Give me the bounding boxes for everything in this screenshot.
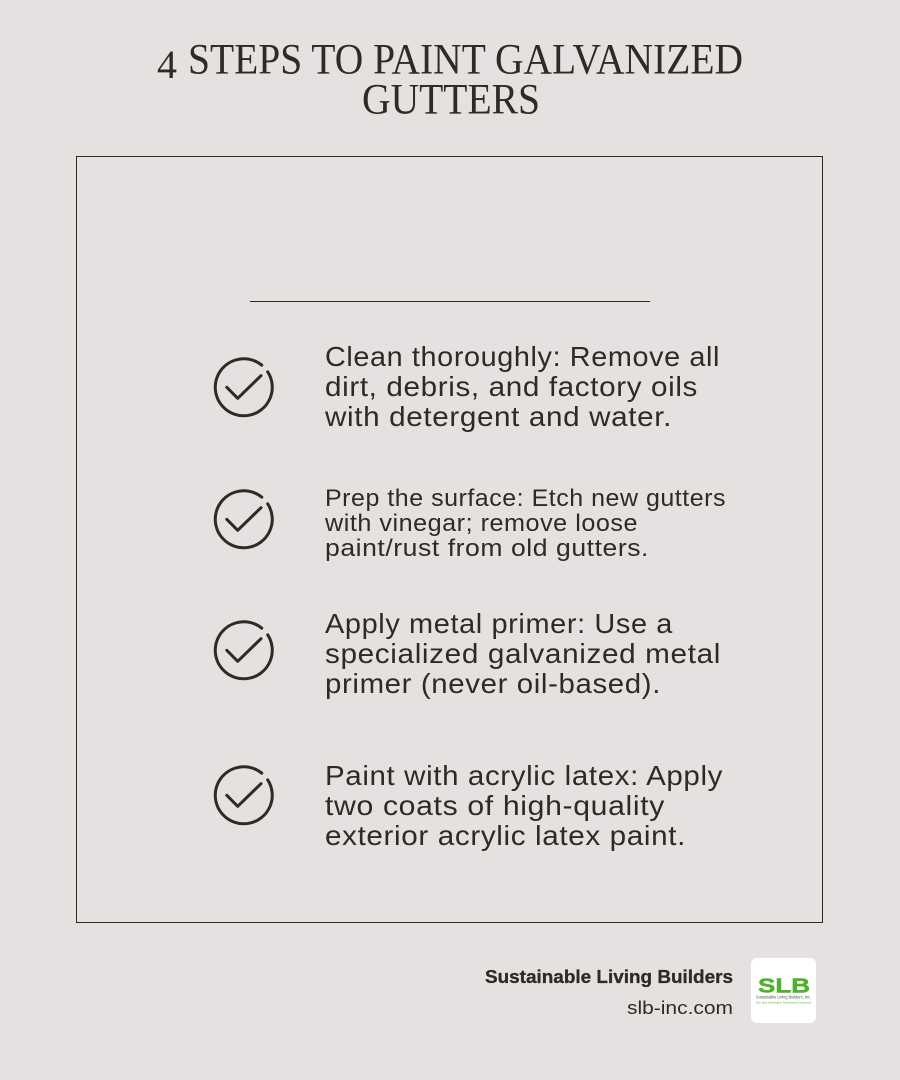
text: step 2: with vinegar; remove loose (324, 510, 638, 537)
step 2 (215, 485, 726, 562)
icon: SLB logo: SLB (758, 975, 810, 998)
text: step 3: Apply metal primer: Use a (325, 608, 673, 639)
text: step 2: Prep the surface: Etch new gutters (325, 485, 726, 512)
footer: brand text: slb-inc.com (627, 997, 733, 1018)
icon: check circle 1 (215, 359, 272, 416)
icon: SLB logo (751, 958, 816, 1023)
text: step 4 (325, 760, 723, 851)
footer: brand text: Sustainable Living Builders (485, 967, 733, 987)
icon: check circle 3 (215, 622, 272, 679)
text: step 3: specialized galvanized metal (325, 638, 721, 669)
icon: SLB logo: Roof, Solar, Electrification, Residential and Commercial (756, 1000, 811, 1004)
text: step 1 (324, 341, 720, 432)
text: step 4: exterior acrylic latex paint. (325, 820, 686, 851)
step 3 (215, 608, 721, 699)
text: step 1: with detergent and water. (324, 401, 672, 432)
panel: steps frame (76, 156, 822, 922)
text: step 3 (325, 608, 721, 699)
text: step 1: dirt, debris, and factory oils (325, 371, 698, 402)
text: step 2: paint/rust from old gutters. (325, 535, 649, 562)
title: STEPS TO PAINT GALVANIZED (188, 36, 743, 84)
icon: SLB logo: Sustainable Living Builders, Inc. (756, 994, 811, 1000)
icon: check circle 4 (215, 767, 272, 824)
text: step 1: Clean thoroughly: Remove all (325, 341, 720, 372)
text: step 4: two coats of high-quality (325, 790, 665, 821)
title: 4 (157, 42, 177, 87)
text: step 3: primer (never oil-based). (325, 668, 661, 699)
step 4 (215, 760, 723, 851)
title: GUTTERS (362, 76, 540, 124)
icon: check circle 2 (215, 491, 272, 548)
text: step 4: Paint with acrylic latex: Apply (325, 760, 723, 791)
title (157, 36, 743, 124)
text: step 2 (324, 485, 726, 562)
footer: brand text (485, 967, 733, 1018)
step 1 (215, 341, 720, 432)
